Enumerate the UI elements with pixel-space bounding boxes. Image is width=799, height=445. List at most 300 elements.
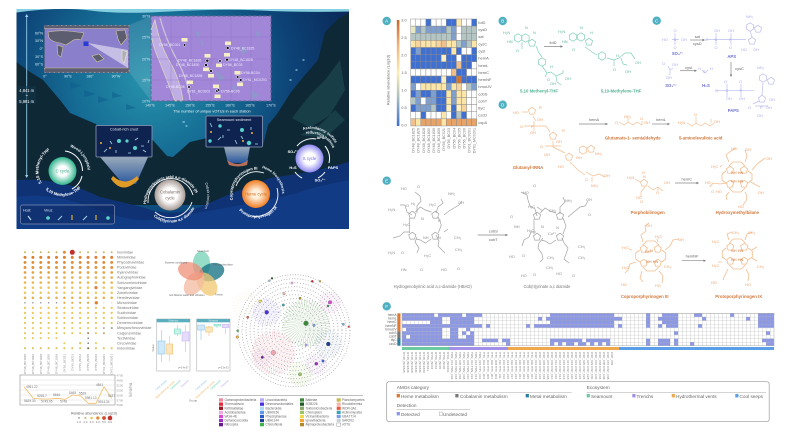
detection legend: Detection — [397, 403, 417, 408]
world map inset: 0° — [43, 74, 47, 78]
Cobalamin cycle — [143, 175, 210, 223]
gene labels — [478, 20, 492, 125]
S cycle: reduction pathway — [306, 130, 334, 148]
map axis labels: 30°N — [35, 39, 43, 43]
size legend: Relative abundance (Log10) — [71, 412, 117, 416]
molecule: cob(II)yrinate: CH₃ — [578, 255, 586, 260]
molecule: HBAD — [388, 184, 464, 272]
arrow: hemL: hemL — [656, 117, 667, 122]
molecule: coproporphyrinogen III: HO — [655, 283, 661, 288]
molecule: hydroxymethylbilane: HO — [731, 146, 737, 151]
molecule: 5,10-methylene-THF: HN — [562, 39, 568, 44]
molecule: cob(II)yrinate: HO — [521, 273, 527, 278]
molecule: HBAD: HO — [441, 267, 447, 272]
gene labels: cysC — [478, 41, 487, 46]
panel badge F: F — [385, 304, 388, 309]
molecule: 5,10 methenyl-THF: H₂N — [503, 30, 510, 35]
molecule: coproporphyrinogen III: HO — [621, 282, 627, 287]
family labels: Podoviridae — [117, 266, 136, 270]
colour scale: Relative abundance (Log10) — [386, 54, 390, 105]
station labels: DY48_BC1839 — [54, 354, 58, 374]
molecules in lilac: O — [674, 45, 677, 50]
molecule: glutamyl-tRNA: OH — [604, 173, 610, 178]
molecule: cob(II)yrinate: HO — [509, 254, 515, 259]
molecule: glutamyl-tRNA: OH — [576, 155, 582, 160]
arrow: hemC: hemC — [682, 176, 692, 182]
molecule: coproporphyrinogen III: CH₃ — [664, 264, 672, 269]
family labels: Zobellviridae — [117, 291, 138, 295]
detection legend: Undetected — [443, 412, 467, 417]
bubbles — [183, 60, 304, 126]
compound labels: APS — [727, 54, 736, 59]
legend column 4: Actinomycetia — [342, 410, 362, 414]
family labels: Autographiviridae — [117, 276, 146, 280]
molecule: 5-aminolevulinic acid: H₂N — [678, 120, 685, 125]
depth scale: 4,841 m — [19, 88, 35, 93]
station labels: DY56_BC06 — [94, 354, 98, 371]
molecule: porphobilinogen: N — [643, 174, 646, 179]
station map: 150°E — [185, 104, 196, 108]
molecules in lilac — [662, 14, 775, 118]
size legend: 3.0 — [90, 420, 94, 424]
family labels: Inoviridae — [117, 250, 133, 254]
panel badge B — [498, 17, 507, 25]
legend column 4: Planctomycetes — [342, 398, 365, 402]
legend column 1: Gammaproteobacteria — [224, 398, 256, 402]
panel badge F — [382, 302, 391, 310]
label: coproporphyrinogen III: Coproporphyrinogen III — [621, 294, 669, 299]
molecule: porphobilinogen: O — [640, 199, 643, 204]
station labels — [23, 354, 114, 375]
dark rock silhouette — [16, 13, 349, 205]
molecule: cob(II)yrinate: CH₃ — [547, 255, 555, 260]
legend column 3: Chloroplast — [306, 410, 322, 414]
size legend: 1.0 — [77, 420, 81, 424]
station map axes: 25°N — [142, 36, 150, 40]
molecule: glutamate-1-semialdehyde: OH — [644, 120, 650, 125]
label: protoporphyrinogen IX: Protoporphyrinogen IX — [715, 294, 762, 299]
station map — [142, 14, 277, 114]
station map axes: 30°N — [142, 14, 150, 18]
molecule: coproporphyrinogen III: N — [650, 248, 653, 253]
legend column 3: Alphaproteobacteria — [306, 423, 334, 427]
ecosystem legend: Ecosystem — [587, 385, 610, 390]
world map inset: 180° — [86, 74, 94, 78]
molecules in lilac: P — [740, 88, 742, 93]
simpson panel: Simpson — [208, 320, 219, 323]
molecule: HBAD: O — [401, 250, 404, 255]
Heme cycle: Heme biosynthesis — [262, 166, 285, 194]
legend column 1 — [219, 398, 256, 427]
molecule: 5,10-methylene-THF: H — [616, 53, 619, 58]
ecosystem legend: Hydrothermal vents — [676, 394, 717, 399]
gene labels: hemC — [478, 70, 489, 75]
bubble rows — [25, 252, 112, 348]
molecule: porphobilinogen: H — [642, 170, 645, 175]
station map axes — [142, 14, 150, 104]
station labels: DY48_BC1825 — [23, 354, 27, 374]
map axis labels: 60°N — [35, 32, 43, 36]
gene row labels: hemNF — [385, 324, 397, 328]
gene labels: tlyC — [478, 106, 485, 111]
world map inset: 90°W — [112, 74, 121, 78]
map axis labels — [35, 32, 44, 66]
molecule: hydroxymethylbilane: HO — [705, 180, 711, 185]
group labels: Hydrothermal vents — [194, 379, 216, 400]
host hubs — [236, 277, 350, 376]
panel E: cobalamin reaction — [382, 176, 592, 289]
gene row labels: tlyC — [391, 338, 397, 342]
molecule: glutamyl-tRNA: OH — [537, 117, 543, 122]
family labels: Herelleviridae — [117, 296, 140, 300]
molecules in lilac: O — [739, 79, 742, 84]
panel badge B: B — [501, 19, 504, 24]
panel B: folD reaction — [498, 17, 642, 93]
group labels: Hydrothermal vents — [154, 379, 176, 400]
group labels: Trenchs — [219, 378, 230, 389]
shannon panel: Shannon — [168, 320, 179, 323]
molecule: glutamyl-tRNA: NH₂ — [591, 183, 599, 188]
compound labels: SO₄²⁻ — [672, 51, 684, 56]
arrow: sat / cysD: cysD — [693, 41, 702, 46]
S cycle: H₂S — [289, 165, 297, 170]
family labels: Microviridae — [117, 301, 137, 305]
depth line chart: 5529 — [79, 392, 86, 396]
arrow: hemC — [675, 176, 699, 184]
venn diagram — [165, 249, 233, 300]
depth line chart: 5748 — [60, 400, 67, 404]
seawater background — [16, 9, 349, 229]
molecule: HBAD: O — [457, 266, 460, 271]
panel badge A: A — [385, 19, 389, 24]
depth line chart: 5100 — [116, 384, 124, 388]
ecosystem legend: Trenchs — [636, 394, 654, 399]
molecule: glutamate-1-semialdehyde: O — [615, 120, 618, 125]
arrow: folD: folD — [549, 40, 557, 45]
label: 5-aminolevulinic acid: 5-aminolevulinic acid — [679, 136, 723, 140]
molecule: cob(II)yrinate — [509, 183, 592, 278]
molecule: 5,10 methenyl-THF: OH — [565, 76, 571, 81]
station count tags — [182, 38, 243, 98]
molecule: coproporphyrinogen III: NH — [645, 249, 651, 254]
molecule: 5,10 methenyl-THF: HN — [507, 39, 513, 44]
seabed texture — [16, 180, 349, 229]
legend column 1: Acidobacteriae — [224, 410, 246, 414]
gene labels: cysI — [478, 48, 485, 54]
molecule: hydroxymethylbilane: HO — [738, 204, 744, 209]
Cobalamin cycle: Cobalamin — [160, 190, 181, 194]
AMG category legend: AMGs category — [397, 385, 430, 390]
size legend: 5.0 — [102, 420, 106, 424]
legend column 2: Desmonostoxidales — [266, 402, 294, 406]
group labels: Cold seeps — [194, 378, 208, 391]
station labels: DY56_BC06 — [462, 128, 466, 148]
gene row labels — [385, 313, 397, 346]
ecosystem legend: Cool seeps — [740, 394, 764, 399]
molecules in lilac: H — [698, 66, 701, 71]
gene row labels: cobT — [389, 335, 397, 339]
AMG category legend: Heme metabolism — [401, 394, 439, 399]
arrow: hemL — [652, 117, 670, 125]
depth line chart: 5300 — [116, 388, 124, 392]
legend column 3: SOB226 — [306, 402, 318, 406]
panel F sample labels: DY48_BC1825 DY48_BC1826 DY48_BC1828 DY48_BC1830 DY48_BC1836 DY48_BC1839 DY56_BC021 DY56_BC03 DY56_BC04 DY56_BC05 DY56_BC06 DY61_BC0201 TRN_001 TRN_002 TRN_003 TRN_004 TRN_005 TRN_006 TRN_007 TRN_008 TRN_009 TRN_010 TRN_011 TRN_012 TRN_013 TRN_014 TRN_015 HTV_001 HTV_002 HTV_003 HTV_004 HTV_005 HTV_006 HTV_007 HTV_008 HTV_009 HTV_010 HTV_011 HTV_012 HTV_013 HTV_014 HTV_015 HTV_016 HTV_017 HTV_018 HTV_019 HTV_020 HTV_021 HTV_022 HTV_023 HTV_024 HTV_025 HTV_026 HTV_027 CSP_001 CSP_002 CSP_003 CSP_004 CSP_005 CSP_006 CSP_007 CSP_008 CSP_009 CSP_010 CSP_011 CSP_012 CSP_013 CSP_014 CSP_015 CSP_016 CSP_017 CSP_018 CSP_019 CSP_020 CSP_021 CSP_022 CSP_023 CSP_024 CSP_025 CSP_026 CSP_027 CSP_028 CSP_029 CSP_030 CSP_031 CSP_032 CSP_033 CSP_034 CSP_035 CSP_036 CSP_037 CSP_038 CSP_039 — [402, 352, 614, 379]
legend: host and virus icons: Virus: — [44, 208, 53, 212]
molecule: cob(II)yrinate: CH₃ — [549, 208, 557, 213]
molecules in lilac: OH — [757, 113, 763, 118]
molecules in lilac: OH — [769, 97, 775, 102]
molecules in lilac: O — [715, 88, 718, 93]
shannon panel: p=3.4e-07 — [178, 368, 189, 370]
station labels: DY56_BC021 — [442, 128, 446, 151]
molecule: HBAD: HN — [401, 267, 407, 272]
S cycle: SO₃²⁻ — [315, 178, 325, 182]
station labels — [412, 128, 477, 153]
station map: 140°E — [145, 104, 156, 108]
S cycle: PAPS — [328, 165, 339, 170]
station names: DY61_BC0201 — [187, 89, 210, 93]
map grid — [151, 16, 271, 101]
legend box — [387, 382, 769, 422]
molecule: HBAD: N — [438, 235, 441, 240]
station labels: DY48_BC1828 — [39, 354, 43, 374]
station names: DY56_BC021 — [159, 43, 180, 47]
gene row labels: czcD — [389, 342, 397, 346]
legend column 2: Lincolnbacteria — [266, 398, 287, 402]
venn diagram: Seamount — [197, 249, 209, 253]
molecule: coproporphyrinogen III: OH — [646, 223, 652, 228]
station map: 155°E — [205, 104, 216, 108]
label: methenyl: 5,10 Methenyl-THF — [520, 88, 558, 94]
molecule: 5,10-methylene-THF: H₂N — [558, 29, 565, 34]
network legend — [217, 395, 365, 427]
AMG category legend — [397, 385, 572, 399]
station names: DY48_BC1839 — [179, 74, 202, 78]
molecule: hydroxymethylbilane: HO — [716, 189, 722, 194]
station markers — [183, 44, 242, 92]
molecule: cob(II)yrinate: H₃C — [528, 204, 535, 209]
molecule: coproporphyrinogen III: H₃C — [655, 234, 662, 239]
group labels: Seamount — [209, 379, 222, 391]
molecule: coproporphyrinogen III: H₃C — [622, 265, 629, 270]
legend column 2: UBA1144 — [266, 419, 279, 423]
molecule: protoporphyrinogen IX: H₃C — [712, 263, 719, 268]
S cycle: SO₄²⁻ — [288, 149, 298, 154]
molecule: cob(II)yrinate: Co²⁺ — [548, 231, 556, 236]
molecule: glutamyl-tRNA: OH — [530, 130, 536, 135]
station map axes: 20°N — [142, 58, 150, 62]
molecules in lilac: O — [674, 28, 677, 33]
molecule: HBAD: O — [406, 203, 409, 208]
molecule: cob(II)yrinate: N — [541, 224, 544, 229]
molecule: HBAD: H₂N — [388, 250, 395, 255]
compound labels — [665, 51, 739, 113]
molecule: cob(II)yrinate: OH — [586, 197, 592, 202]
legend column 1: Kiritimatiellae — [224, 406, 244, 410]
station labels: DY48_BC1830 — [47, 354, 51, 374]
station map: 145°E — [165, 104, 176, 108]
molecule: protoporphyrinogen IX: CH₃ — [748, 230, 756, 235]
simpson panel: p=2.3e-03 — [218, 368, 229, 370]
molecule: coproporphyrinogen III: NH HN — [646, 259, 659, 264]
depth line chart — [20, 374, 132, 407]
molecule: HBAD: H₃ — [411, 201, 416, 206]
station labels: DY61_BC0201 — [468, 128, 472, 153]
bubble plot of viral families — [20, 250, 151, 424]
arrow: folD — [544, 40, 563, 48]
colour scale: 0.5 — [401, 105, 407, 110]
colour scale: 1.0 — [401, 88, 408, 92]
molecule: cob(II)yrinate: O — [588, 212, 591, 217]
arrow: cysC: cysC — [735, 66, 744, 71]
molecule: hydroxymethylbilane: NH HN — [731, 178, 744, 184]
group labels: Trenchs — [179, 378, 190, 389]
molecules in lilac: O — [662, 61, 665, 66]
molecule: HBAD: H₃C — [424, 253, 431, 258]
molecule: glutamyl-tRNA: R — [562, 128, 565, 133]
gene labels: folD — [478, 20, 486, 25]
panel badge D: D — [501, 102, 505, 107]
family labels — [117, 250, 151, 350]
family labels: Circoviridae — [117, 341, 136, 345]
molecule: glutamate-1-semialdehyde: NH₂ — [624, 114, 632, 119]
Heme cycle: Heme cycle — [245, 192, 268, 196]
legend column 3 — [300, 398, 334, 427]
station names: DY56_BC03 — [223, 63, 243, 67]
label: semialdehyde: Glutamate-1- semialdehyde — [605, 136, 661, 140]
depth line chart: 5646 — [53, 393, 60, 397]
group labels: Seamount — [169, 379, 182, 391]
molecule: cob(II)yrinate: NH₂ — [565, 198, 573, 203]
molecules in lilac: P — [729, 37, 732, 42]
depth line chart: 5900 — [116, 403, 124, 407]
AMG category legend: Metal metabolism — [530, 394, 567, 399]
molecule: hydroxymethylbilane: OH — [745, 147, 751, 152]
molecule: glutamyl-tRNA: HO — [513, 110, 519, 115]
size legend: 4.0 — [96, 420, 100, 424]
map frame — [44, 26, 129, 72]
family labels: Yangangviridae — [117, 286, 142, 290]
family labels: Schizomimiviridae — [117, 281, 147, 285]
legend column 1: Dehalococcoidia — [224, 419, 248, 423]
arrow: sat / cysD — [690, 34, 705, 46]
C cycle — [36, 144, 90, 198]
molecule: 5,10 methenyl-THF: OH — [550, 81, 556, 86]
depth line chart: 5465 — [69, 391, 76, 395]
panel D: heme biosynthesis — [498, 100, 772, 299]
molecule: 5,10 methenyl-THF — [503, 25, 571, 86]
S cycle — [288, 126, 339, 182]
simpson panel — [197, 319, 230, 371]
C cycle: Wood-Ljungdahl — [70, 144, 90, 170]
depth line chart: 5437 — [108, 394, 115, 398]
molecule: glutamyl-tRNA: OH — [556, 139, 562, 144]
legend column 4: WOR-3A1 — [342, 406, 357, 410]
trench arcs and seamount shading — [151, 20, 183, 101]
molecule: glutamyl-tRNA — [513, 105, 610, 188]
panel badge E: E — [385, 178, 388, 183]
venn diagram: Hot Marine water and vibration — [169, 293, 205, 297]
arrow: sat / cysD: sat — [695, 34, 701, 39]
molecules in lilac: OH — [753, 47, 759, 52]
legend column 2: Bacteroidia — [266, 406, 282, 410]
molecules in lilac: S — [714, 37, 718, 42]
molecule: glutamyl-tRNA: P — [531, 124, 534, 129]
molecule: coproporphyrinogen III: OH — [678, 237, 684, 242]
shannon panel: Value — [151, 344, 155, 352]
station labels: DY61_BC0201 — [102, 354, 106, 374]
molecule: HBAD: NH — [423, 235, 429, 240]
depth line chart: 5500 — [116, 394, 124, 398]
molecule: 5,10 methenyl-THF: N — [533, 30, 536, 35]
sampling area marker — [84, 42, 88, 46]
group labels — [154, 378, 230, 400]
family labels: Schitoviridae — [117, 316, 138, 320]
callout: seamount sediment: Seamount sediment — [217, 117, 252, 122]
label: porphobilinogen: Porphobilinogen — [631, 210, 665, 215]
molecules in lilac: HO — [662, 37, 668, 42]
molecule: 5,10-methylene-THF: OH — [625, 69, 631, 74]
legend column 3: Vicinamibacteria — [306, 414, 329, 418]
molecule: protoporphyrinogen IX: H₃C — [712, 239, 719, 244]
depth line chart: 5629.33 — [24, 399, 36, 403]
legend column 4: SAR202 — [342, 419, 354, 423]
Cobalamin cycle: Cob(II)yrinate a,c diamide — [154, 208, 194, 223]
depth line chart: 4841 — [96, 383, 103, 387]
molecule: HBAD: CH₃ — [454, 235, 462, 240]
panel A: AMG heatmap — [382, 17, 492, 153]
molecules in lilac: O — [714, 45, 718, 50]
family labels: Indoviridae — [117, 346, 135, 350]
gene row labels: cobS — [389, 331, 397, 335]
molecule: 5,10-methylene-THF: O — [613, 67, 616, 72]
legend column 4: vOTU — [342, 423, 351, 427]
ecosystem legend: Seamount — [591, 394, 613, 399]
arrow: cysI: cysI — [685, 65, 692, 70]
station names — [159, 43, 267, 93]
molecules in lilac: NH₂ — [757, 65, 765, 70]
venn diagram: Deep subsurface — [213, 262, 233, 266]
panel badge C: C — [655, 18, 659, 23]
size legend: 6.0 — [108, 420, 112, 424]
station map: 160°E — [225, 104, 236, 108]
station labels: DY48_BC1839 — [437, 128, 441, 153]
molecule: glutamyl-tRNA: O — [585, 177, 588, 182]
station labels: DY48_BC1828 — [422, 128, 426, 153]
legend column 2 — [260, 398, 294, 427]
molecule: protoporphyrinogen IX: HO — [711, 280, 717, 285]
gene row labels: hemA — [388, 313, 397, 317]
map axis labels: 30°S — [35, 55, 44, 59]
molecule: hydroxymethylbilane: OH — [766, 156, 772, 161]
legend column 4: Rhodothermia — [342, 402, 362, 406]
molecule: protoporphyrinogen IX: NH HN — [731, 257, 744, 262]
legend: host and virus icons — [20, 205, 114, 224]
station names: DY56-BC04 — [241, 71, 260, 75]
legend column 2: Phycisphaerae — [266, 414, 287, 418]
S cycle: APS — [316, 135, 325, 140]
heatmap cells — [411, 19, 477, 126]
molecule: porphobilinogen: O — [656, 190, 659, 195]
legend column 3: Tektomicrobacteria — [306, 406, 332, 410]
molecule: HBAD: N — [438, 218, 441, 223]
molecule: glutamyl-tRNA: R — [539, 105, 542, 110]
molecule: protoporphyrinogen IX: CH₃ — [732, 230, 740, 235]
group axis title: Group — [189, 398, 197, 402]
station labels: DY56_BC04 — [452, 128, 456, 148]
molecule: HBAD: CH₃ — [455, 247, 463, 252]
station names: DY56-BC05 — [221, 89, 240, 93]
